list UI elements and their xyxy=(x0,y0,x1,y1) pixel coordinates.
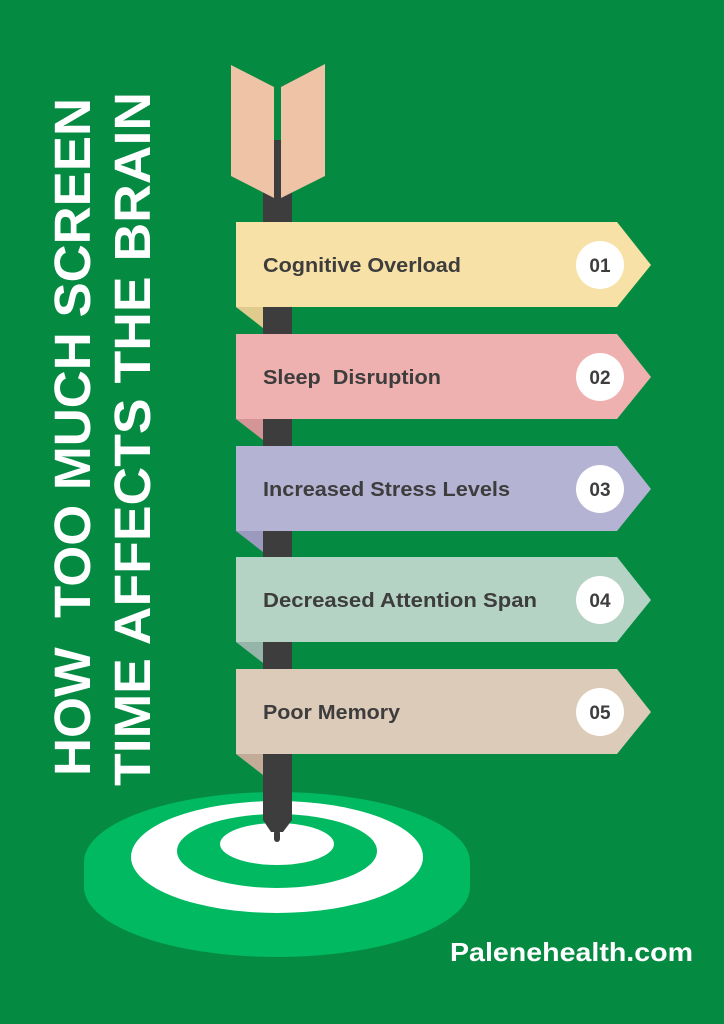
arrow shaft xyxy=(263,140,292,842)
banner 04: Decreased Attention Span xyxy=(263,590,537,612)
banner 01: Cognitive Overload xyxy=(263,255,461,277)
banner 01: 01 xyxy=(589,256,611,277)
banner 05: Poor Memory xyxy=(263,702,401,724)
banner 02: 02 xyxy=(589,368,611,389)
banner 03 xyxy=(236,446,651,552)
arrow fletching xyxy=(231,64,325,198)
title xyxy=(44,92,161,786)
banner 02 xyxy=(236,334,651,440)
banner 01 xyxy=(236,222,651,328)
banner 05: 05 xyxy=(589,703,611,724)
title: TIME AFFECTS THE BRAIN xyxy=(104,92,161,786)
banner 03: Increased Stress Levels xyxy=(263,479,510,501)
banner 04: 04 xyxy=(589,591,611,612)
banner 02: Sleep Disruption xyxy=(263,367,441,389)
title: HOW TOO MUCH SCREEN xyxy=(44,98,101,776)
target xyxy=(84,792,470,957)
banner 04 xyxy=(236,557,651,663)
banner 03: 03 xyxy=(589,480,611,501)
banner 05 xyxy=(236,669,651,775)
footer website: Palenehealth.com xyxy=(450,937,693,967)
